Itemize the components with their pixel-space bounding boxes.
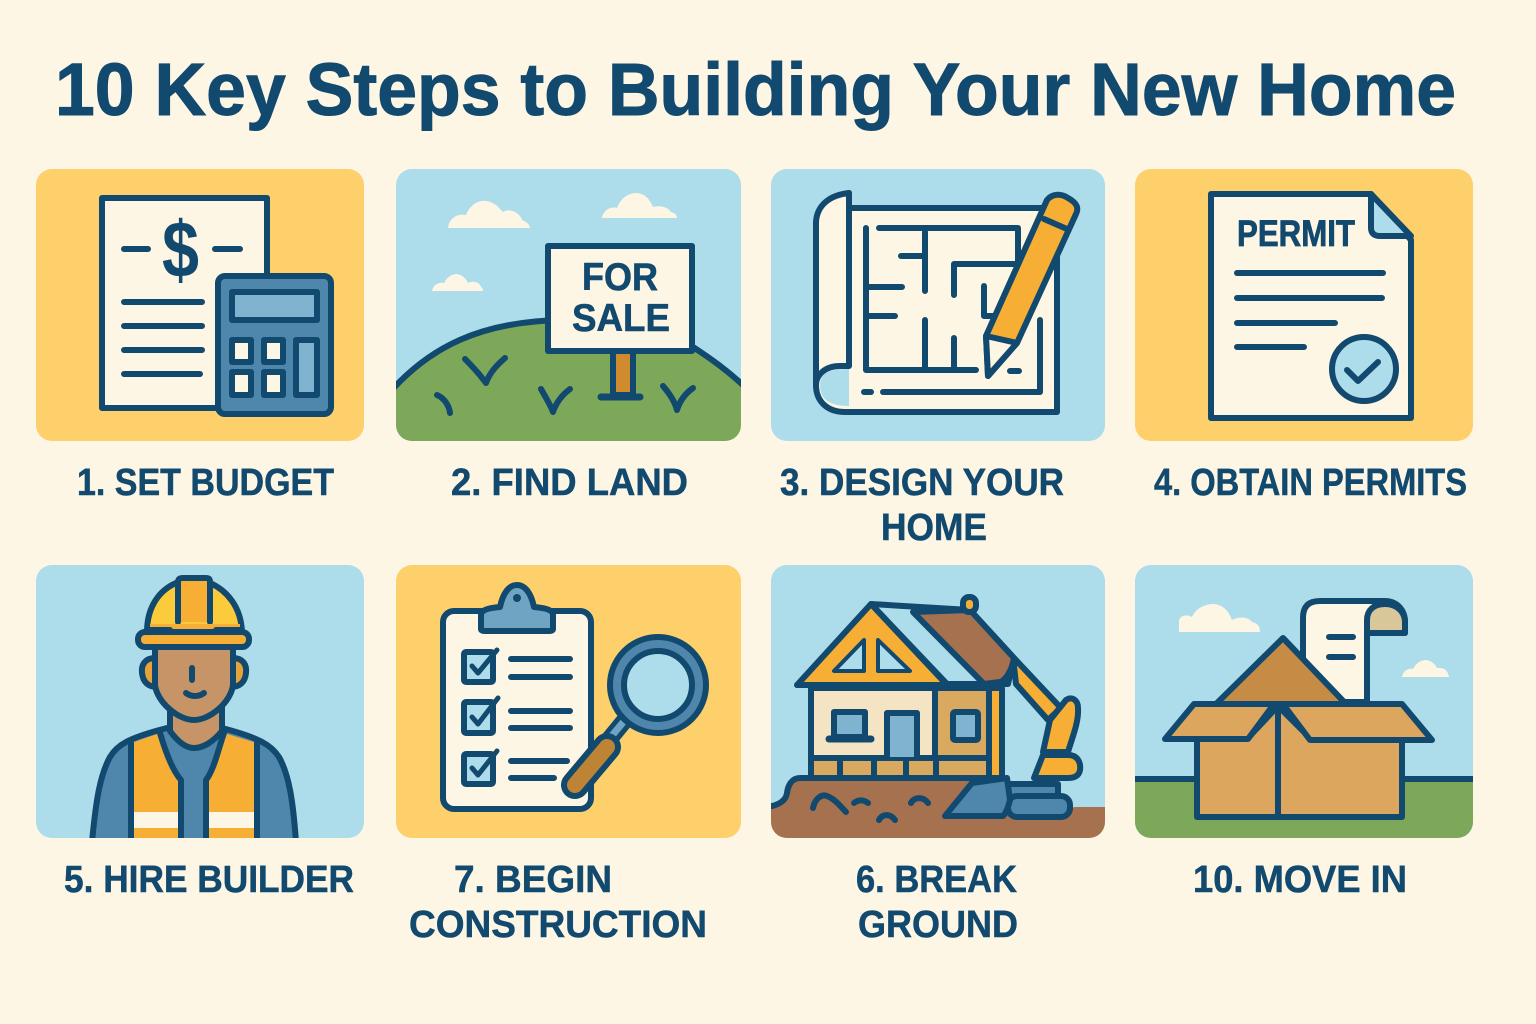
excavator stick xyxy=(1043,698,1078,752)
window right xyxy=(953,712,978,740)
label 1: 1. SET BUDGET xyxy=(77,462,334,504)
face xyxy=(155,645,233,720)
clouds xyxy=(1179,604,1449,677)
icon: blueprint xyxy=(816,193,1057,412)
grass xyxy=(437,358,693,413)
panel: 6 break ground xyxy=(765,565,1110,845)
excavator cab xyxy=(1034,755,1080,778)
icon: calculator xyxy=(218,276,331,414)
icon: builder xyxy=(92,578,296,842)
sign post xyxy=(601,351,640,397)
label 7 xyxy=(409,859,707,946)
for sale sign xyxy=(548,246,692,351)
label 3: 3. DESIGN YOUR xyxy=(780,462,1064,504)
label 7: 7. BEGIN xyxy=(454,859,612,901)
safety vest xyxy=(131,733,257,842)
excavator boom xyxy=(1013,657,1061,720)
label 4: 4. OBTAIN PERMITS xyxy=(1154,462,1467,504)
hard hat xyxy=(138,578,249,647)
gable truss xyxy=(797,604,947,685)
title: 10 Key Steps to Building Your New Home xyxy=(55,48,1456,131)
label 6: 6. BREAK xyxy=(856,859,1017,901)
soil marks xyxy=(813,796,928,820)
chimney xyxy=(963,597,976,612)
label 5: 5. HIRE BUILDER xyxy=(64,859,354,901)
ears xyxy=(142,658,157,687)
panel: 10 move in xyxy=(1130,565,1478,844)
roof xyxy=(797,597,1014,685)
hill xyxy=(390,320,748,450)
panel: 4 obtain permits xyxy=(1135,169,1473,441)
for sale sign: FOR xyxy=(582,256,658,299)
label 10: 10. MOVE IN xyxy=(1193,859,1407,901)
window left xyxy=(834,712,865,737)
label 3: HOME xyxy=(881,507,987,549)
icon: clipboard xyxy=(443,585,591,809)
roof triangle xyxy=(1216,638,1346,704)
body and sleeves xyxy=(92,728,296,842)
panel: 5 hire builder xyxy=(36,565,364,842)
panel: 1 set budget xyxy=(36,169,364,441)
icon: budget sheet xyxy=(102,198,267,408)
icon: magnifying glass xyxy=(575,637,706,785)
icon: pencil xyxy=(986,195,1077,376)
icon: permit document: PERMIT xyxy=(1237,213,1355,254)
ground xyxy=(765,778,1110,845)
ground xyxy=(1130,779,1478,844)
icon: scroll xyxy=(1303,601,1405,702)
door xyxy=(887,713,917,757)
house walls xyxy=(811,688,1002,778)
excavator base xyxy=(945,778,1070,817)
icon: budget sheet: $ xyxy=(162,205,199,294)
panel: 2 find land xyxy=(390,169,748,450)
label 3 xyxy=(780,462,1064,549)
for sale sign: SALE xyxy=(572,297,670,340)
icon: permit document xyxy=(1211,194,1411,418)
panel: 3 design your home xyxy=(771,169,1105,441)
panel: 7 begin construction xyxy=(396,565,741,838)
neck xyxy=(170,708,222,748)
label 6 xyxy=(856,859,1018,946)
clouds xyxy=(432,193,677,291)
label 2: 2. FIND LAND xyxy=(451,462,688,504)
icon: open box xyxy=(1165,704,1432,817)
label 7: CONSTRUCTION xyxy=(409,904,707,946)
label 6: GROUND xyxy=(858,904,1018,946)
